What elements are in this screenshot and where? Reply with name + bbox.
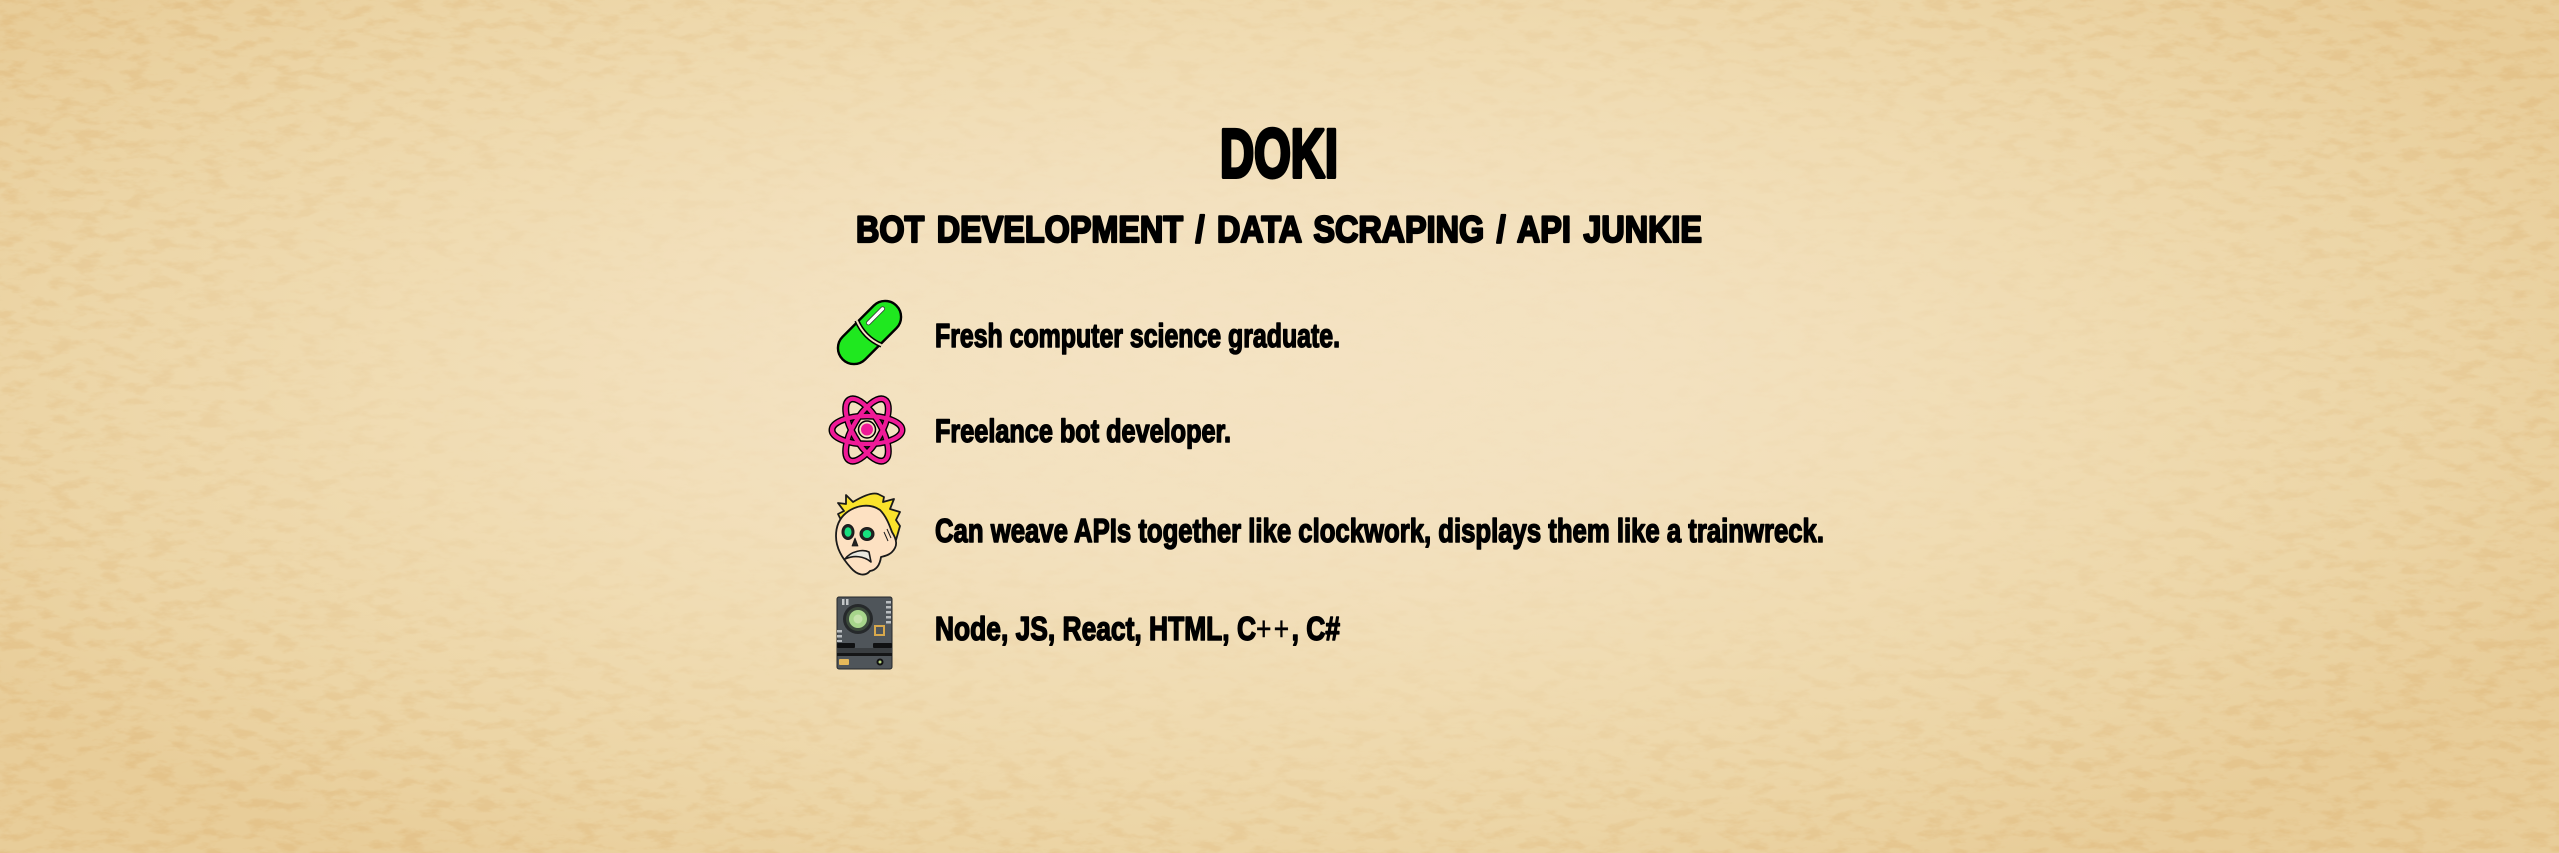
icon: green pill [830,293,909,372]
item: stack [837,597,1340,669]
icon: zombie head [836,493,900,575]
icon: pink atom [832,393,902,467]
item: graduate [830,293,1340,372]
text: APIs: Can weave APIs together like clockwork, displays them like a trainwreck. [935,512,1824,549]
text: freelance: Freelance bot developer. [935,413,1231,449]
subtitle: BOT DEVELOPMENT / DATA SCRAPING / API JUNKIE [856,209,1702,250]
text: stack: Node, JS, React, HTML, C++, C# [935,610,1340,647]
item: freelance [832,393,1231,467]
text: graduate: Fresh computer science graduate. [935,317,1340,354]
title: DOKI [1220,115,1338,192]
icon: circuit device [837,597,892,669]
item: APIs [836,493,1824,575]
